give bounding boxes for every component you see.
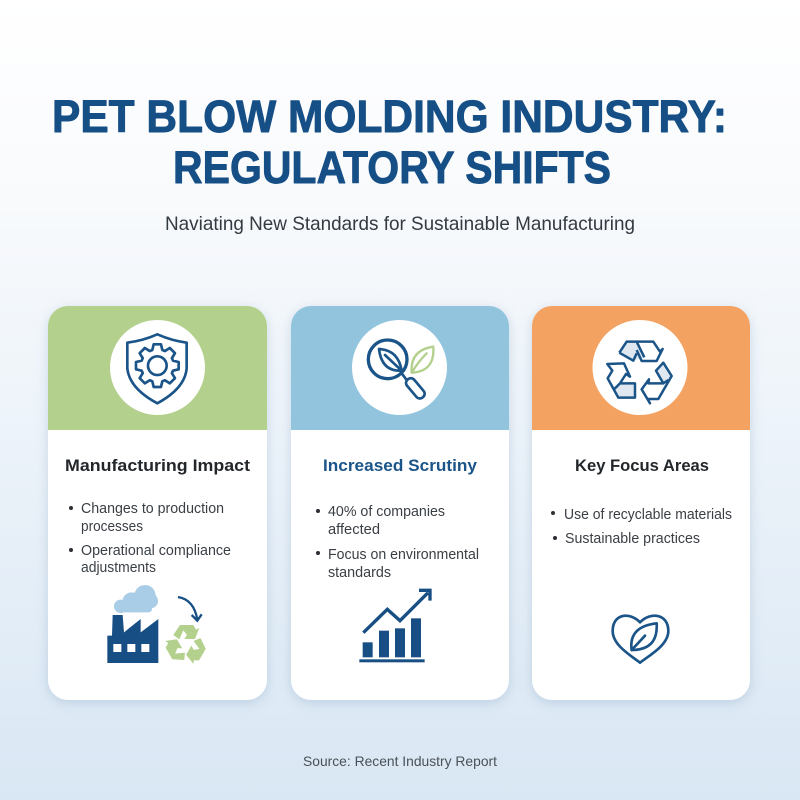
- bullet list: increased scrutiny: Focus on environmental: [328, 547, 479, 563]
- panel header: blue: [291, 306, 509, 430]
- bullet list: key focus areas: Sustainable practices: [565, 531, 700, 547]
- heading: manufacturing impact: Manufacturing Impact: [65, 456, 250, 475]
- icon: shield with gear: [110, 320, 205, 415]
- bullet list: key focus areas: [551, 507, 732, 547]
- panel: key focus areas: [532, 306, 750, 700]
- panel: increased scrutiny: [291, 306, 509, 700]
- title: REGULATORY SHIFTS: [173, 142, 611, 193]
- icon: cloud: [114, 585, 158, 613]
- panel header: green: [48, 306, 267, 430]
- arrow: curved down: [178, 597, 202, 621]
- source note: Source: Recent Industry Report: [303, 753, 497, 769]
- heading: increased scrutiny: Increased Scrutiny: [323, 456, 478, 475]
- heading: key focus areas: Key Focus Areas: [575, 456, 709, 475]
- icon: magnifier with leaf: [352, 320, 447, 415]
- title: PET BLOW MOLDING INDUSTRY:: [52, 91, 727, 142]
- icon: heart with leaf: [613, 616, 668, 663]
- bullet list: increased scrutiny: standards: [328, 565, 391, 581]
- panel header: orange: [532, 306, 750, 430]
- bullet list: manufacturing impact: [69, 501, 231, 576]
- icon: green recycle: [163, 625, 209, 666]
- bullet list: manufacturing impact: processes: [81, 519, 143, 535]
- subtitle: Naviating New Standards for Sustainable Manufacturing: [165, 213, 635, 235]
- bullet list: increased scrutiny: [316, 504, 479, 581]
- bullet list: increased scrutiny: 40% of companies: [328, 504, 445, 520]
- icon: rising bar chart: [359, 590, 430, 662]
- panel: manufacturing impact: [48, 306, 267, 700]
- icon: recycling arrows: [592, 320, 688, 415]
- title: [52, 91, 727, 193]
- icon: factory: [107, 615, 158, 663]
- bullet list: increased scrutiny: affected: [328, 522, 380, 538]
- bullet list: key focus areas: Use of recyclable materials: [564, 507, 732, 523]
- bullet list: manufacturing impact: adjustments: [81, 560, 156, 576]
- bullet list: manufacturing impact: Operational compliance: [81, 543, 231, 559]
- bullet list: manufacturing impact: Changes to production: [81, 501, 224, 517]
- icon: factory with cloud and recycling: [107, 585, 209, 666]
